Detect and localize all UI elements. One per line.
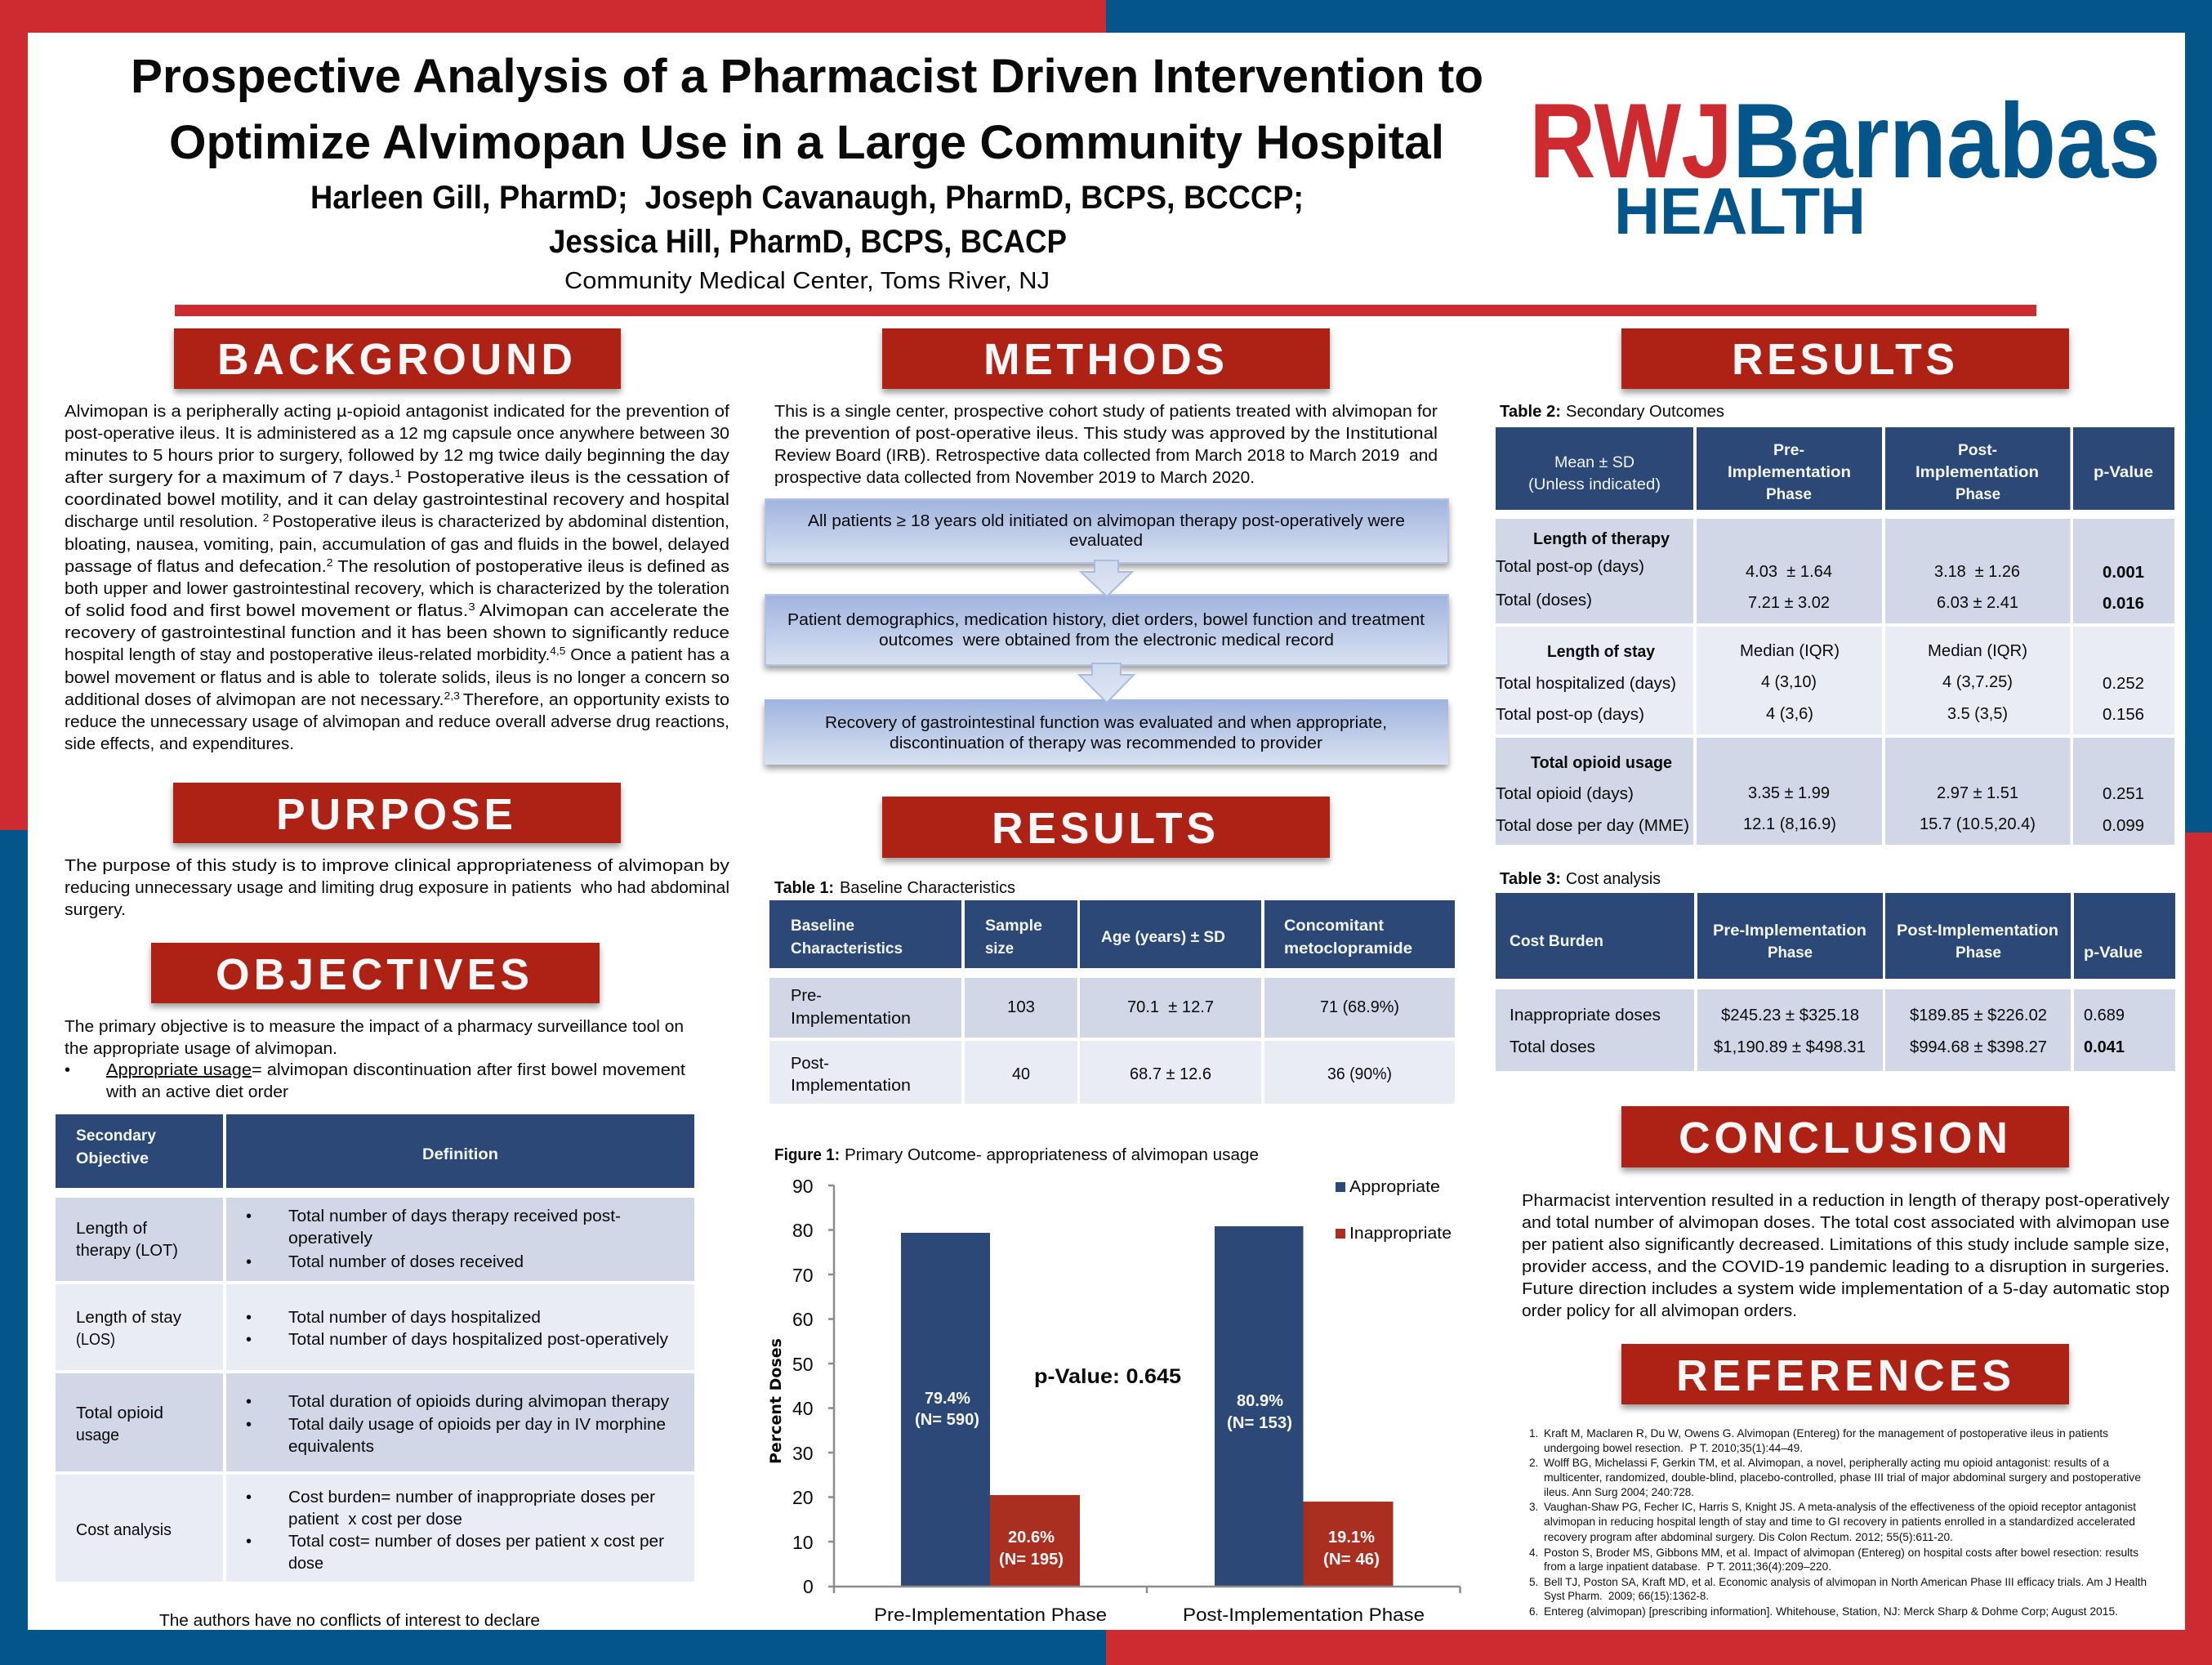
table 2: secondary outcomes: Total opioid (days) [1496, 785, 1634, 803]
table: secondary objectives: • [246, 1207, 252, 1225]
table 1: baseline characteristics: Age (years) ± SD [1101, 928, 1225, 946]
text block: conclusion [1522, 1192, 2170, 1320]
flow step 2: Patient demographics, medication history, diet orders, bowel function and treatment [787, 611, 1425, 629]
table 2: secondary outcomes: 3.5 (3,5) [1947, 705, 2008, 723]
reference list: 5. [1529, 1576, 1538, 1588]
text block: purpose [65, 857, 729, 919]
table 2: secondary outcomes: 0.001 [2103, 564, 2144, 582]
flow step 1 [765, 499, 1448, 563]
text block: methods: the prevention of post-operative ileus. This study was approved by the Institutional [774, 425, 1438, 443]
flow step 3 [765, 699, 1448, 765]
y axis: 90 [792, 1176, 814, 1197]
table: secondary objectives: Cost burden= number of inappropriate doses per [288, 1489, 655, 1507]
table 2: secondary outcomes: p-Value [2094, 463, 2153, 481]
text block: background: Alvimopan can accelerate the [475, 602, 729, 620]
reference list [1529, 1427, 2147, 1618]
caption: table 1: Baseline Characteristics [840, 879, 1015, 897]
y axis: 10 [792, 1532, 814, 1553]
text block: purpose: The purpose of this study is to improve clinical appropriateness of alvimopan by [65, 857, 729, 875]
table 3: cost analysis [1496, 893, 2175, 1071]
arrow: step 1 to step 2 [1081, 560, 1132, 596]
text block: background: hospital length of stay and postoperative ileus-related morbidity. [65, 646, 524, 664]
panel: conclusion [1522, 1106, 2170, 1320]
reference list: undergoing bowel resection. P T. 2010;35(1):44–49. [1544, 1442, 1803, 1454]
table 2: secondary outcomes: Total post-op (days) [1496, 706, 1644, 724]
p-value annotation: p-Value: 0.645 [1034, 1365, 1181, 1388]
table 2: secondary outcomes: Total (doses) [1496, 591, 1592, 609]
heading: purpose: PURPOSE [276, 791, 513, 839]
table: secondary objectives: • [246, 1309, 252, 1327]
bars: pre-implementation: 79.4% [925, 1390, 970, 1408]
caption: figure 1: Figure 1: [774, 1146, 840, 1164]
table 2: secondary outcomes: 0.252 [2103, 675, 2144, 693]
table: secondary objectives: patient x cost per dose [288, 1511, 462, 1529]
heading: results [1621, 328, 2069, 389]
table 2: secondary outcomes: Post- [1958, 441, 1997, 459]
reference list: alvimopan in reducing hospital length of stay and time to GI recovery in patients enrolled in a standardized accelerated [1544, 1515, 2135, 1528]
text block: background: Postoperative ileus is characterized by abdominal distention, [272, 513, 729, 531]
table 2: secondary outcomes: Total post-op (days) [1496, 558, 1644, 576]
text block: background: coordinated bowel motility, and it can delay gastrointestinal recovery and hospital [65, 491, 729, 509]
text block: conclusion: Future direction includes a system wide implementation of a 5-day automatic stop [1522, 1280, 2170, 1298]
text block: primary objective: the appropriate usage of alvimopan. [65, 1040, 337, 1058]
text block: background: Postoperative ileus is the cessation of [402, 469, 730, 487]
panel: references [1529, 1344, 2147, 1618]
table 3: cost analysis: Inappropriate doses [1510, 1007, 1661, 1024]
flow step 3: Recovery of gastrointestinal function was evaluated and when appropriate, [825, 714, 1387, 732]
reference list: 4. [1529, 1547, 1538, 1559]
text block: methods: This is a single center, prospective cohort study of patients treated with alvimopan for [774, 403, 1438, 421]
reference list: Syst Pharm. 2009; 66(15):1362-8. [1544, 1590, 1709, 1602]
text block: methods: Review Board (IRB). Retrospective data collected from March 2018 to March 2019 and [774, 447, 1438, 465]
reference list: Kraft M, Maclaren R, Du W, Owens G. Alvimopan (Entereg) for the management of postoperative ileus in patients [1544, 1427, 2108, 1440]
x axis [834, 1587, 1461, 1625]
table: secondary objectives [56, 1114, 694, 1582]
text block: background: bloating, nausea, vomiting, pain, accumulation of gas and fluids in the bowel, delayed [65, 536, 729, 554]
table 2: secondary outcomes: Total dose per day (MME) [1496, 817, 1689, 835]
text block: background: post-operative ileus. It is administered as a 12 mg capsule once anywhere between 30 [65, 425, 729, 443]
text block: background: 3 [468, 600, 475, 613]
reference list: multicenter, randomized, double-blind, placebo-controlled, phase III trial of major abdominal surgery and postoperative [1544, 1471, 2141, 1484]
table: secondary objectives: Objective [76, 1149, 149, 1167]
text block: primary objective: The primary objective is to measure the impact of a pharmacy surveillance tool on [65, 1018, 684, 1036]
table 2: secondary outcomes: 4 (3,10) [1761, 673, 1817, 691]
table 3: cost analysis: 0.041 [2084, 1038, 2125, 1056]
table 1: baseline characteristics: metoclopramide [1284, 940, 1412, 957]
table 2: secondary outcomes: Pre- [1773, 441, 1804, 459]
caption: table 2: Secondary Outcomes [1566, 403, 1724, 421]
bars: post-implementation: (N= 153) [1227, 1414, 1292, 1432]
caption: table 3: Cost analysis [1566, 870, 1661, 888]
text block: background: minutes to 5 hours prior to surgery, followed by 12 mg twice daily beginning the day [65, 447, 729, 465]
text block: background: discharge until resolution. [65, 513, 250, 531]
text block: background: additional doses of alvimopan are not necessary. [65, 691, 417, 709]
bars: post-implementation: 19.1% [1328, 1529, 1375, 1547]
table 2: secondary outcomes: Median (IQR) [1928, 642, 2027, 660]
text block: background: of solid food and first bowel movement or flatus. [65, 602, 411, 620]
y axis: 20 [792, 1487, 814, 1508]
reference list: Vaughan-Shaw PG, Fecher IC, Harris S, Knight JS. A meta-analysis of the effectiveness of the opioid receptor antagonist [1544, 1501, 2136, 1513]
table 2: secondary outcomes: 0.016 [2103, 595, 2144, 613]
table: secondary objectives: Total number of days therapy received post- [288, 1207, 621, 1225]
y axis title: Percent Doses [767, 1338, 785, 1464]
x axis: Post-Implementation Phase [1183, 1605, 1425, 1625]
logo: RWJBarnabas Health [1529, 81, 2161, 248]
heading: objectives [151, 943, 600, 1003]
table: secondary objectives: • [246, 1393, 252, 1411]
heading: conclusion: CONCLUSION [1679, 1114, 2008, 1163]
bars: pre-implementation: (N= 195) [999, 1551, 1064, 1569]
table: secondary objectives: Length of [76, 1220, 147, 1238]
title divider bar [175, 305, 2036, 316]
table 1: baseline characteristics: 68.7 ± 12.6 [1130, 1065, 1211, 1083]
reference list: 3. [1529, 1501, 1538, 1513]
table 2: secondary outcomes: Implementation [1728, 463, 1851, 481]
text block: background: 2,3 [444, 690, 463, 702]
table: secondary objectives: Total number of days hospitalized post-operatively [288, 1331, 668, 1349]
text block: background: reduce the unnecessary usage of alvimopan and reduce overall adverse drug reactions, [65, 713, 729, 731]
panel: results right [1496, 328, 2175, 1071]
y axis: 30 [792, 1443, 814, 1464]
table 1: baseline characteristics: 40 [1012, 1065, 1030, 1083]
text block: background: recovery of gastrointestinal function and it has been shown to significantly reduce [65, 624, 729, 642]
table 2: secondary outcomes: Phase [1766, 485, 1812, 503]
table 2: secondary outcomes: 3.18 ± 1.26 [1934, 563, 2020, 581]
table: secondary objectives: therapy (LOT) [76, 1242, 178, 1260]
legend: Appropriate [1349, 1178, 1440, 1196]
text block: purpose: reducing unnecessary usage and limiting drug exposure in patients who had abdominal [65, 879, 729, 897]
table 3: cost analysis: p-Value [2084, 944, 2143, 962]
y axis: 80 [792, 1220, 814, 1241]
table: secondary objectives: • [246, 1489, 252, 1507]
table 1: baseline characteristics: Post- [791, 1055, 829, 1073]
table: secondary objectives: Total daily usage of opioids per day in IV morphine [288, 1416, 666, 1434]
table: secondary objectives: Secondary [76, 1127, 156, 1145]
text block: methods [774, 403, 1438, 487]
heading: references: REFERENCES [1676, 1352, 2011, 1400]
table 3: cost analysis: $1,190.89 ± $498.31 [1714, 1038, 1866, 1056]
table 1: baseline characteristics: Characteristics [791, 940, 903, 957]
flowchart [765, 499, 1448, 765]
table 3: cost analysis: 0.689 [2084, 1007, 2125, 1024]
text block: primary objective: with an active diet order [105, 1083, 288, 1101]
bars: pre-implementation: (N= 590) [915, 1411, 979, 1429]
table 2: secondary outcomes: Length of stay [1547, 643, 1656, 661]
table 2: secondary outcomes: 0.156 [2103, 706, 2144, 724]
text block: background: 2 [263, 511, 272, 524]
bars: post-implementation: 80.9% [1237, 1392, 1283, 1410]
text block: background [65, 403, 730, 753]
heading: methods: METHODS [983, 336, 1224, 384]
table 2: secondary outcomes: 4 (3,7.25) [1942, 673, 2013, 691]
heading: background [174, 328, 621, 389]
table: secondary objectives: Definition [422, 1145, 498, 1163]
table 1: baseline characteristics: Implementation [791, 1077, 911, 1095]
panel: objectives [56, 943, 694, 1630]
table 1: baseline characteristics: Pre- [791, 987, 822, 1005]
table 2: secondary outcomes [1496, 427, 2174, 845]
table 2: secondary outcomes: 4.03 ± 1.64 [1746, 563, 1832, 581]
heading: objectives: OBJECTIVES [216, 951, 529, 999]
caption: figure 1: Primary Outcome- appropriateness of alvimopan usage [845, 1146, 1259, 1164]
table 3: cost analysis: Total doses [1510, 1038, 1595, 1056]
table 3: cost analysis: Cost Burden [1510, 932, 1603, 950]
flow step 2: outcomes were obtained from the electronic medical record [879, 632, 1334, 649]
table 1: baseline characteristics [769, 900, 1455, 1104]
y axis: 60 [792, 1309, 814, 1330]
text block: background: after surgery for a maximum of 7 days. [65, 469, 344, 487]
table: secondary objectives: usage [76, 1426, 119, 1444]
text block: background: 4,5 [550, 645, 565, 657]
text block: primary objective: Appropriate usage = alvimopan discontinuation after first bowel movement [106, 1061, 685, 1079]
text block: background: passage of flatus and defecation. [65, 558, 305, 576]
panel: methods [765, 328, 1448, 765]
heading: results: RESULTS [992, 805, 1215, 853]
x axis: Pre-Implementation Phase [874, 1605, 1107, 1625]
table: secondary objectives: • [246, 1253, 252, 1271]
reference list: 2. [1529, 1457, 1538, 1469]
heading: methods [882, 328, 1330, 389]
table: secondary objectives: Total duration of opioids during alvimopan therapy [288, 1393, 669, 1411]
panel: background [65, 328, 730, 753]
text block: methods: prospective data collected from November 2019 to March 2020. [774, 469, 1255, 487]
authors: Jessica Hill, PharmD, BCPS, BCACP [549, 224, 1067, 260]
heading: results [882, 797, 1330, 858]
text block: conclusion: order policy for all alvimopan orders. [1522, 1302, 1797, 1320]
text block: conclusion: and total number of alvimopan doses. The total cost associated with alvimopan use [1522, 1214, 2170, 1232]
text block: purpose: surgery. [65, 901, 126, 919]
text block: background: 1 [395, 467, 402, 480]
logo: RWJBarnabas Health: RWJ [1529, 81, 1733, 200]
table: secondary objectives: equivalents [288, 1438, 374, 1456]
heading: background: BACKGROUND [217, 336, 573, 384]
table 2: secondary outcomes: 4 (3,6) [1766, 705, 1813, 723]
table 3: cost analysis: $994.68 ± $398.27 [1910, 1038, 2047, 1056]
reference list: 1. [1529, 1427, 1538, 1440]
table 1: baseline characteristics: Sample [985, 917, 1042, 935]
text block: primary objective: • [65, 1061, 70, 1079]
table: secondary objectives: • [246, 1416, 252, 1434]
table 3: cost analysis: Pre-Implementation [1713, 922, 1866, 940]
text block: background: The resolution of postoperative ileus is defined as [333, 558, 729, 576]
table 2: secondary outcomes: 7.21 ± 3.02 [1748, 594, 1830, 612]
table 2: secondary outcomes: Total hospitalized (days) [1496, 675, 1676, 693]
table 2: secondary outcomes: 0.251 [2103, 785, 2144, 803]
text block: conclusion: Pharmacist intervention resulted in a reduction in length of therapy post-operatively [1522, 1192, 2170, 1210]
table: secondary objectives: operatively [288, 1230, 372, 1248]
table 1: baseline characteristics: 103 [1007, 998, 1035, 1016]
legend: Inappropriate [1349, 1225, 1452, 1243]
y axis: 70 [792, 1265, 814, 1286]
reference list: Bell TJ, Poston SA, Kraft MD, et al. Economic analysis of alvimopan in North American Phase III efficacy trials. Am J Health [1544, 1576, 2147, 1588]
caption: table 3 [1500, 870, 1661, 888]
table 2: secondary outcomes: Mean ± SD [1554, 453, 1634, 471]
text block: primary objective [65, 1018, 685, 1101]
caption: table 2: Table 2: [1500, 403, 1561, 421]
reference list: 6. [1529, 1605, 1538, 1618]
text block: background: both upper and lower gastrointestinal recovery, which is characterized by the toleration [65, 580, 729, 598]
text block: conclusion: provider access, and the COVID-19 pandemic leading to a disruption in surgeries. [1522, 1258, 2170, 1276]
table: secondary objectives: Total opioid [76, 1404, 163, 1422]
panel: purpose [65, 783, 729, 919]
bars: post-implementation [1215, 1226, 1394, 1586]
flow step 3: discontinuation of therapy was recommended to provider [890, 734, 1322, 752]
table 3: cost analysis: $189.85 ± $226.02 [1910, 1007, 2047, 1024]
table 2: secondary outcomes: Length of therapy [1533, 530, 1670, 548]
legend [1336, 1178, 1452, 1243]
flow step 2 [765, 595, 1448, 665]
table 1: baseline characteristics: 36 (90%) [1327, 1065, 1392, 1083]
table 3: cost analysis: Phase [1768, 944, 1813, 962]
table 1: baseline characteristics: 70.1 ± 12.7 [1127, 998, 1214, 1016]
text block: background: side effects, and expenditures. [65, 735, 294, 753]
table 2: secondary outcomes: 6.03 ± 2.41 [1937, 594, 2018, 612]
reference list: Poston S, Broder MS, Gibbons MM, et al. Impact of alvimopan (Entereg) on hospital costs after bowel resection: results [1544, 1547, 2138, 1559]
bars: pre-implementation: 20.6% [1008, 1529, 1055, 1547]
caption: table 3: Table 3: [1500, 870, 1561, 888]
text block: background: Alvimopan is a peripherally acting µ-opioid antagonist indicated for the prevention of [65, 403, 729, 421]
table 2: secondary outcomes: (Unless indicated) [1528, 475, 1661, 493]
bars: post-implementation: (N= 46) [1323, 1551, 1380, 1569]
table 3: cost analysis: Post-Implementation [1897, 922, 2058, 940]
authors [310, 180, 1304, 260]
table: secondary objectives: Total cost= number of doses per patient x cost per [288, 1533, 664, 1551]
table: secondary objectives: dose [288, 1555, 323, 1573]
text block: background: Therefore, an opportunity exists to [463, 691, 729, 709]
title: Optimize Alvimopan Use in a Large Community Hospital [169, 116, 1444, 169]
y axis: 50 [792, 1354, 814, 1375]
reference list: ileus. Ann Surg 2004; 240:728. [1544, 1486, 1694, 1498]
affiliation: Community Medical Center, Toms River, NJ [564, 268, 1050, 294]
heading: results: RESULTS [1732, 336, 1955, 384]
table 1: baseline characteristics: 71 (68.9%) [1320, 998, 1399, 1016]
table 2: secondary outcomes: 15.7 (10.5,20.4) [1920, 815, 2036, 833]
y axis: 0 [803, 1576, 814, 1597]
table: secondary objectives: • [246, 1331, 252, 1349]
y axis: 40 [792, 1398, 814, 1419]
logo: RWJBarnabas Health: Barnabas [1733, 81, 2161, 200]
table 1: baseline characteristics: Baseline [791, 917, 854, 935]
table: secondary objectives: • [246, 1533, 252, 1551]
table: secondary objectives: Total number of doses received [288, 1253, 524, 1271]
text block: background: bowel movement or flatus and is able to tolerate solids, ileus is no longer a concern so [65, 669, 729, 687]
table 3: cost analysis: Phase [1956, 944, 2001, 962]
table 2: secondary outcomes: 2.97 ± 1.51 [1937, 784, 2018, 802]
caption: table 2 [1500, 403, 1724, 421]
reference list: Wolff BG, Michelassi F, Gerkin TM, et al. Alvimopan, a novel, peripherally acting mu opioid antagonist: results of a [1544, 1457, 2109, 1469]
heading: purpose [173, 783, 621, 843]
title: Prospective Analysis of a Pharmacist Driven Intervention to [131, 50, 1483, 103]
table: secondary objectives: Cost analysis [76, 1521, 172, 1539]
table 2: secondary outcomes: Median (IQR) [1740, 642, 1840, 660]
table 2: secondary outcomes: 0.099 [2103, 817, 2144, 835]
text block: conclusion: per patient also significantly decreased. Limitations of this study include sample size, [1522, 1236, 2170, 1254]
reference list: from a large inpatient database. P T. 2011;36(4):209–220. [1544, 1560, 1831, 1573]
reference list: recovery program after abdominal surgery. Dis Colon Rectum. 2012; 55(5):611-20. [1544, 1531, 1953, 1543]
bar chart: primary outcome [767, 1176, 1461, 1625]
reference list: Entereg (alvimopan) [prescribing information]. Whitehouse, Station, NJ: Merck Sharp & Dohme Corp; August 2015. [1544, 1605, 2118, 1618]
heading: references [1621, 1344, 2069, 1404]
text block: background: Once a patient has a [565, 646, 730, 664]
y axis [792, 1176, 834, 1597]
table: secondary objectives: (LOS) [76, 1331, 115, 1349]
table 2: secondary outcomes: 12.1 (8,16.9) [1743, 815, 1836, 833]
bars: pre-implementation [901, 1233, 1080, 1586]
flow step 1: evaluated [1069, 532, 1143, 550]
logo: RWJBarnabas Health: HEALTH [1614, 175, 1866, 248]
table 1: baseline characteristics: Concomitant [1284, 917, 1385, 935]
authors: Harleen Gill, PharmD; Joseph Cavanaugh, PharmD, BCPS, BCCCP; [310, 180, 1304, 216]
flow step 1: All patients ≥ 18 years old initiated on alvimopan therapy post-operatively were [808, 512, 1405, 530]
panel: results middle [767, 797, 1461, 1625]
table 2: secondary outcomes: Implementation [1915, 463, 2039, 481]
table: secondary objectives: Length of stay [76, 1309, 181, 1327]
table 2: secondary outcomes: 3.35 ± 1.99 [1748, 784, 1830, 802]
text block: background: 2 [327, 556, 333, 569]
disclosure note: The authors have no conflicts of interest to declare [159, 1612, 540, 1630]
caption: table 1: Table 1: [774, 879, 834, 897]
table 3: cost analysis: $245.23 ± $325.18 [1721, 1007, 1859, 1024]
table 1: baseline characteristics: Implementation [791, 1010, 911, 1028]
table 2: secondary outcomes: Total opioid usage [1531, 754, 1672, 772]
table: secondary objectives: Total number of days hospitalized [288, 1309, 541, 1327]
table 1: baseline characteristics: size [985, 940, 1014, 957]
arrow: step 2 to step 3 [1079, 663, 1134, 703]
table 2: secondary outcomes: Phase [1956, 485, 2000, 503]
title [131, 50, 1483, 169]
heading: conclusion [1621, 1106, 2069, 1167]
